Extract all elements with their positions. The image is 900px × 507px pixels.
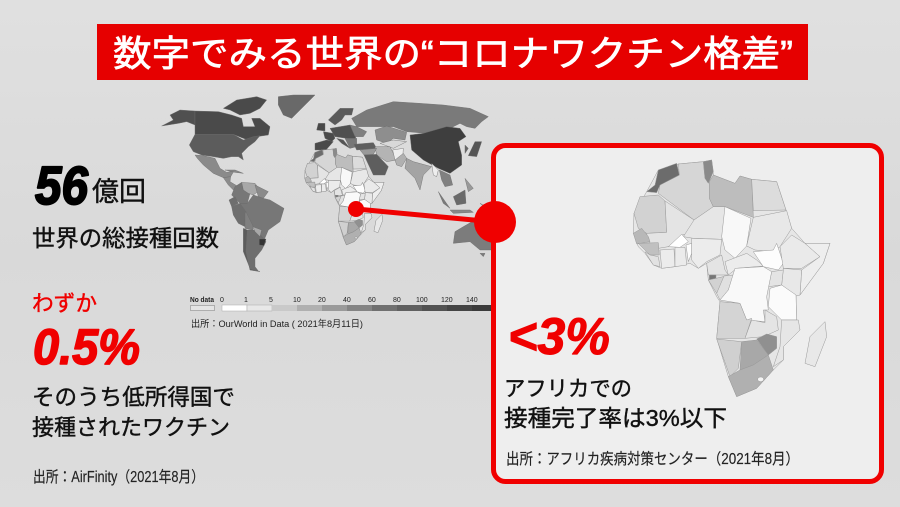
source: AirFinity: 出所：AirFinity（2021年8月） (33, 468, 204, 486)
stat: 5.6 billion doses: 世界の総接種回数 (32, 225, 219, 251)
legend: 60 (368, 297, 376, 304)
map source: 出所：OurWorld in Data ( 2021年8月11日) (191, 318, 363, 330)
legend: 140 (466, 297, 478, 304)
Africa caption (504, 377, 727, 431)
stat: 0.5% in low-income countries: 0.5% (33, 319, 140, 375)
stat: 5.6 billion doses: 億回 (92, 177, 146, 207)
legend: 5 (269, 297, 273, 304)
legend: No data (190, 297, 214, 304)
panel: Africa (494, 146, 882, 482)
stat: 0.5% in low-income countries: わずか (32, 291, 97, 316)
Africa within the world map (305, 148, 384, 245)
legend (190, 297, 493, 311)
connector from Africa on the map to the panel (348, 201, 516, 243)
legend: 120 (441, 297, 453, 304)
source: Africa CDC: 出所：アフリカ疾病対策センター（2021年8月） (506, 450, 799, 468)
stat: 0.5% in low-income countries (32, 291, 235, 440)
stat: 5.6 billion doses (32, 156, 219, 251)
legend: 10 (293, 297, 301, 304)
Africa caption: 接種完了率は3%以下 (504, 405, 727, 431)
legend: 1 (244, 297, 248, 304)
Africa map (633, 160, 830, 397)
legend: 0 (220, 297, 224, 304)
stat: under 3%: <3% (508, 308, 610, 366)
stat: 0.5% in low-income countries: そのうち低所得国で (32, 385, 235, 410)
legend: 40 (343, 297, 351, 304)
title banner: 数字でみる世界の“コロナワクチン格差” (113, 33, 793, 74)
world vaccination map (162, 95, 493, 272)
legend: 80 (393, 297, 401, 304)
Africa caption: アフリカでの (504, 377, 632, 401)
legend: 20 (318, 297, 326, 304)
stat: 0.5% in low-income countries: 接種されたワクチン (32, 415, 230, 440)
title banner (97, 24, 808, 80)
stat: 5.6 billion doses: 56 (35, 156, 89, 216)
legend: 100 (416, 297, 428, 304)
